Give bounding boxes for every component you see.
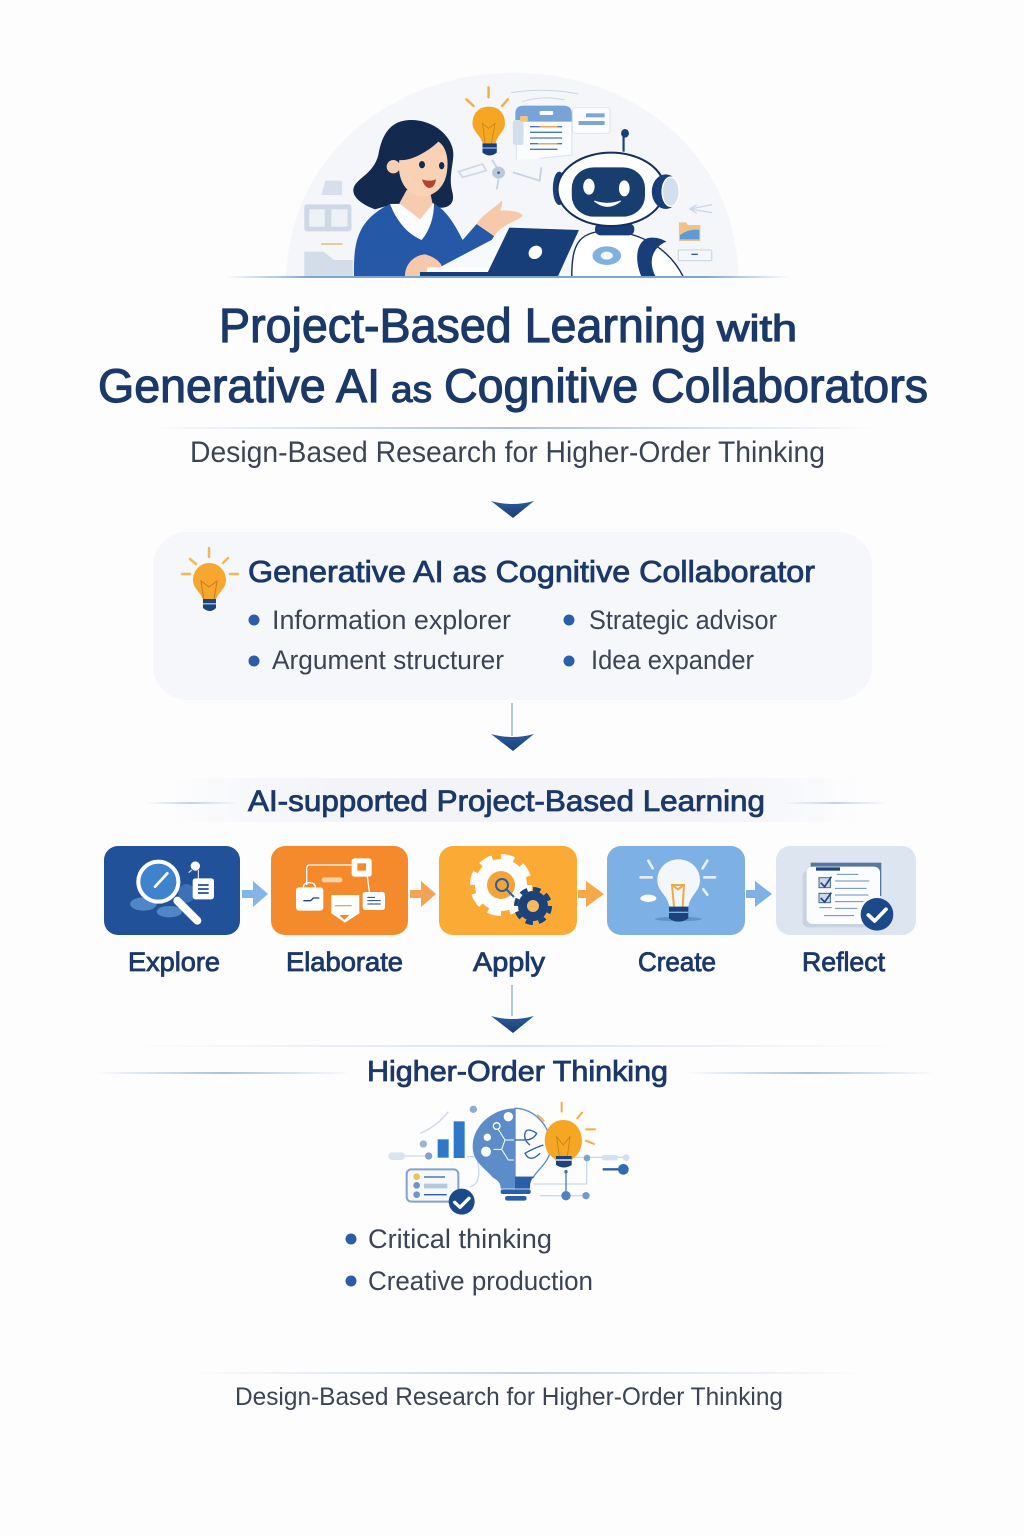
bullet list xyxy=(248,605,777,675)
title xyxy=(98,300,928,412)
step: create xyxy=(607,846,745,977)
arrow xyxy=(410,881,436,907)
central idea sketch xyxy=(459,160,541,189)
left office icons xyxy=(304,181,353,277)
outcomes list: Creative production xyxy=(368,1266,593,1296)
label: Explore xyxy=(128,947,220,977)
woman xyxy=(353,120,523,277)
bullet list: Argument structurer xyxy=(272,645,504,675)
section heading: AI-supported project-based learning xyxy=(145,778,887,822)
section heading: AI-supported project-based learning: AI-supported Project-Based Learning xyxy=(248,785,765,818)
title: Project-Based Learning xyxy=(219,300,706,353)
process flow xyxy=(104,846,916,977)
arrow: panel to process xyxy=(491,703,534,751)
title: with xyxy=(716,308,797,349)
step: reflect xyxy=(776,846,916,977)
label: Apply xyxy=(473,947,546,977)
title: Generative AI xyxy=(98,359,380,412)
arrow xyxy=(746,881,772,907)
label: Elaborate xyxy=(286,947,403,977)
step: apply xyxy=(439,846,577,977)
hero illustration: student and robot xyxy=(286,73,739,277)
laptop xyxy=(420,228,579,277)
step: elaborate xyxy=(271,846,408,977)
title: Cognitive Collaborators xyxy=(444,359,928,412)
label: Reflect xyxy=(802,947,885,977)
document and note cards xyxy=(511,90,610,160)
bullet list: Information explorer xyxy=(272,605,511,635)
arrow: process to outcomes xyxy=(491,985,534,1033)
outcomes list xyxy=(346,1224,593,1296)
robot xyxy=(553,129,683,277)
subtitle: Design-Based Research for Higher-Order Thinking xyxy=(190,436,825,469)
step: explore xyxy=(104,846,240,977)
panel heading: Generative AI as Cognitive Collaborator xyxy=(248,554,815,589)
arrow xyxy=(242,881,268,907)
light bulb xyxy=(466,87,508,155)
hero floor line xyxy=(225,276,790,278)
panel: generative AI as cognitive collaborator xyxy=(153,532,872,700)
label: Create xyxy=(638,947,716,977)
icon: brain, bulb and network xyxy=(388,1103,629,1215)
arrow xyxy=(578,881,604,907)
title: as xyxy=(391,369,432,410)
footer text: Design-Based Research for Higher-Order Thinking xyxy=(235,1383,783,1411)
section heading: higher-order thinking: Higher-Order Thinking xyxy=(367,1056,668,1088)
right office icons xyxy=(678,205,712,261)
bullet list: Strategic advisor xyxy=(589,605,777,635)
arrow: subtitle to panel xyxy=(491,501,534,518)
icon: light bulb xyxy=(182,548,238,611)
outcomes list: Critical thinking xyxy=(368,1224,552,1254)
background dome xyxy=(286,73,739,277)
bullet list: Idea expander xyxy=(591,645,754,675)
